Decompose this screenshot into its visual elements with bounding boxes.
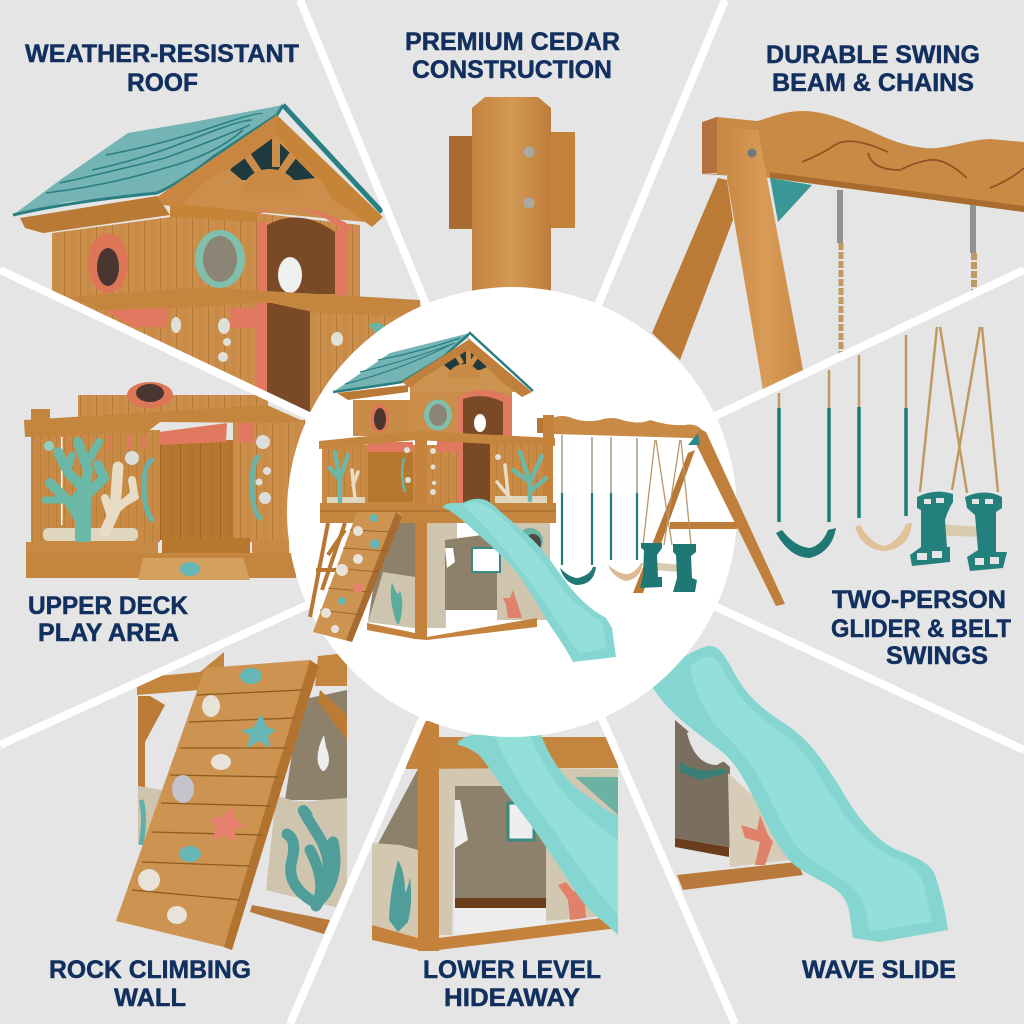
heading: rock climbing wall [49,956,251,1012]
heading: durable swing beam and chains: DURABLE SWING [766,41,980,69]
panel: wave slide [653,646,948,942]
heading: upper deck play area: PLAY AREA [38,619,179,647]
heading: durable swing beam and chains [766,41,980,97]
climbing wall [313,512,402,642]
panel: weather-resistant roof [13,105,420,420]
upper deck [319,415,556,523]
center circle with playset [287,287,785,737]
heading: premium cedar construction [405,28,620,84]
ladder legs [310,523,345,617]
panel: upper deck play area [24,382,305,580]
heading: two-person glider and belt swings: TWO-PERSON [832,586,1006,614]
panel: durable swing beam and chains [652,111,1024,390]
heading: rock climbing wall: WALL [114,984,186,1012]
heading: weather-resistant roof: ROOF [127,69,198,97]
heading: weather-resistant roof [25,40,299,97]
heading: wave slide: WAVE SLIDE [802,956,956,984]
heading: two-person glider and belt swings: GLIDER & BELT [831,615,1011,643]
heading: premium cedar construction: PREMIUM CEDAR [405,28,620,56]
panel: lower level hideaway [372,721,618,951]
swing set [537,415,785,606]
heading: lower level hideaway [423,956,601,1012]
heading: premium cedar construction: CONSTRUCTION [412,56,612,84]
heading: lower level hideaway: LOWER LEVEL [423,956,601,984]
slide [442,499,616,662]
heading: weather-resistant roof: WEATHER-RESISTANT [25,40,299,68]
heading: upper deck play area: UPPER DECK [28,592,188,620]
panel: two-person glider and belt swings [776,327,1007,571]
heading: rock climbing wall: ROCK CLIMBING [49,956,251,984]
heading: upper deck play area [28,592,188,647]
heading: two-person glider and belt swings: SWINGS [886,642,988,670]
panel: premium cedar construction [449,97,575,300]
lower level [367,522,550,640]
heading: two-person glider and belt swings [831,586,1011,670]
heading: durable swing beam and chains: BEAM & CHAINS [772,69,974,97]
house [333,333,533,508]
heading: lower level hideaway: HIDEAWAY [444,984,580,1012]
panel: rock climbing wall [116,652,347,950]
